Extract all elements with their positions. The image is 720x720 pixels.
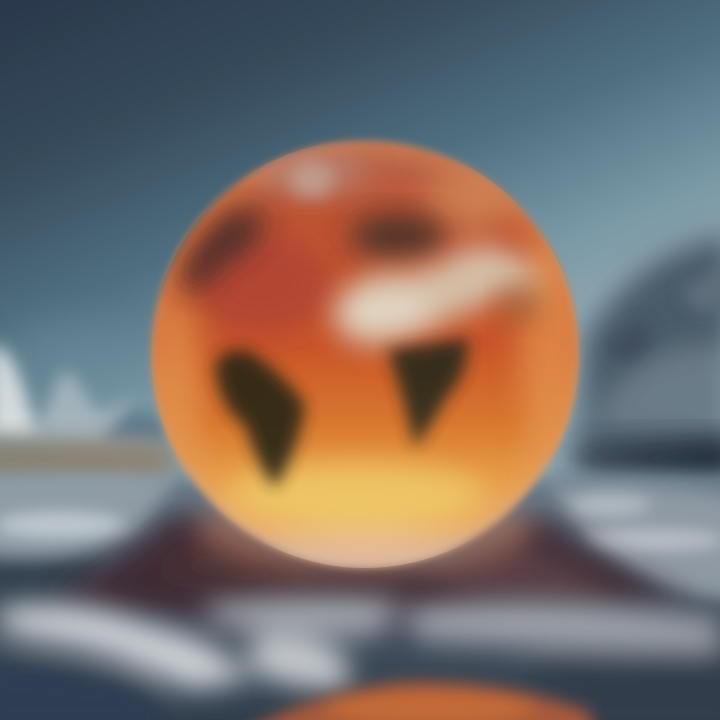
distant shore band — [0, 436, 720, 478]
small dark mark right — [500, 287, 540, 323]
dark continent left of centre — [215, 350, 305, 488]
dark continent upper center — [350, 212, 446, 260]
globe surface shading and continents — [158, 150, 571, 567]
snowy ground — [0, 476, 720, 720]
distant mountains left — [0, 344, 165, 450]
snow patches foreground — [0, 596, 720, 720]
orange reflection in the water — [235, 682, 595, 720]
globe glow — [195, 485, 535, 575]
globe sphere — [151, 140, 579, 568]
mountain right — [580, 235, 720, 470]
pale land mass — [332, 246, 540, 345]
overall softening on sky edge — [0, 320, 120, 380]
pale cloud patch at top — [290, 162, 334, 198]
globe — [151, 140, 579, 568]
warm inner tones — [158, 150, 571, 567]
dark continent upper left — [178, 210, 270, 288]
dark continent right of centre — [388, 338, 468, 448]
dark volcanic mound under globe — [50, 510, 680, 618]
